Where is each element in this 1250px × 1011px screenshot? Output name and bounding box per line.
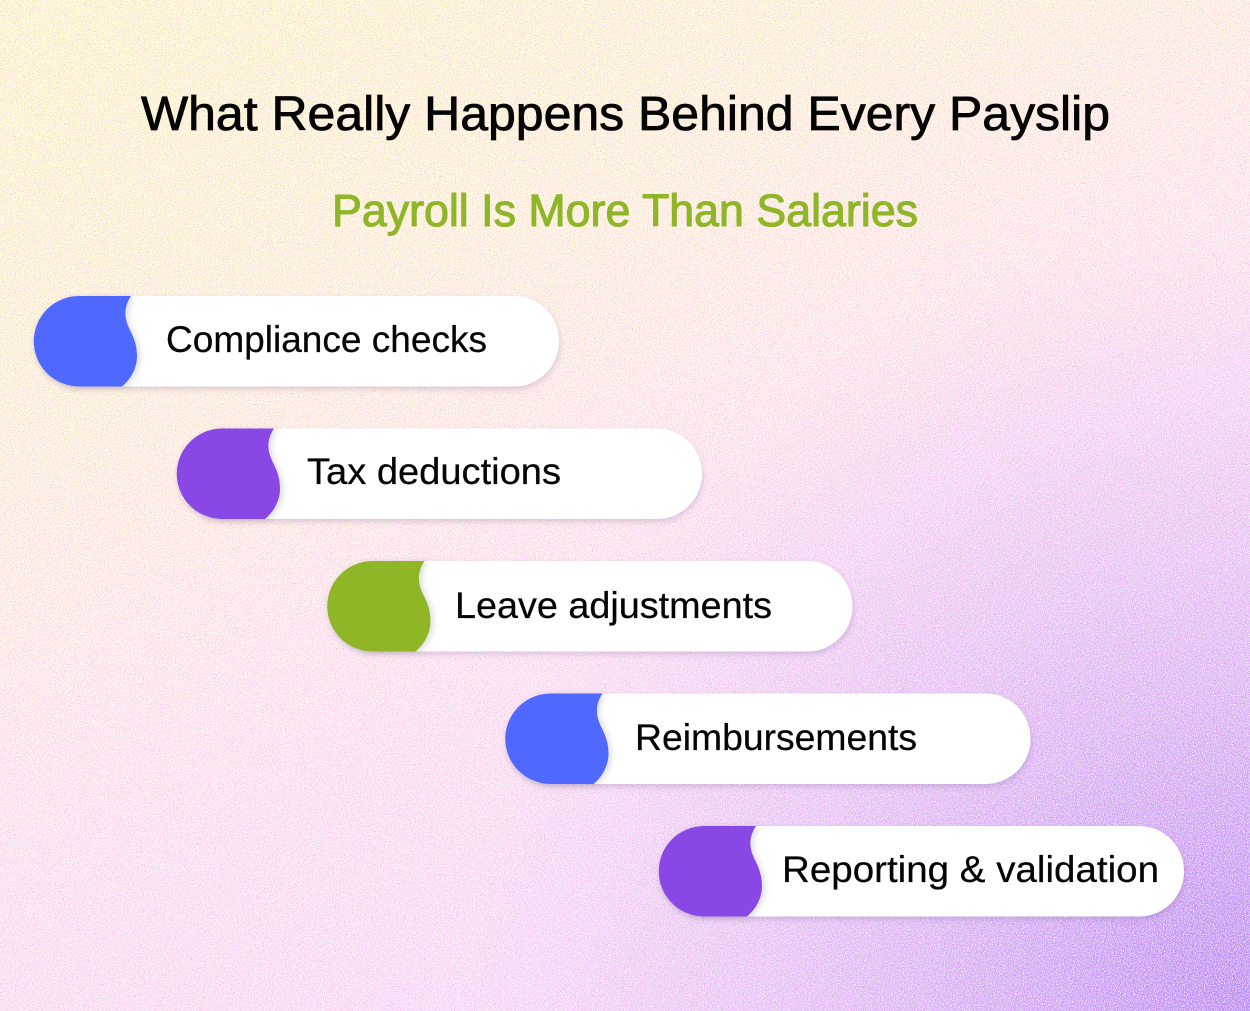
icon: blue blob [505, 694, 608, 784]
item: compliance checks [34, 296, 559, 386]
pill background [328, 561, 852, 652]
icon: blue blob [34, 296, 137, 386]
subtitle: Payroll Is More Than Salaries [332, 185, 918, 236]
pill background [659, 826, 1184, 916]
pill background [506, 694, 1030, 784]
pill background [177, 428, 702, 519]
label: Reimbursements [635, 717, 917, 758]
icon: green blob [327, 561, 430, 652]
icon: purple blob [177, 428, 280, 519]
label: Reporting & validation [782, 849, 1159, 890]
item: tax deductions [177, 428, 702, 519]
label: Leave adjustments [455, 585, 772, 626]
label: Tax deductions [307, 451, 561, 492]
item: reporting and validation [659, 826, 1184, 916]
item: reimbursements [505, 694, 1030, 784]
title: What Really Happens Behind Every Payslip [141, 88, 1110, 141]
label: Compliance checks [166, 319, 487, 360]
item: leave adjustments [327, 561, 852, 652]
icon: purple blob [659, 826, 762, 916]
pill background [34, 296, 559, 386]
